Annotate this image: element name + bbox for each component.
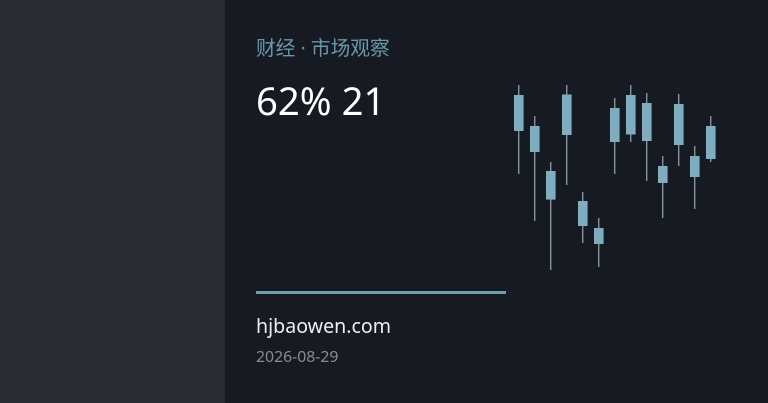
heading: category label: 财经 · 市场观察 [256, 34, 390, 61]
site name: hjbaowen.com [256, 312, 391, 339]
date: 2026-08-29 [256, 345, 338, 367]
headline figures: 62% 21 [256, 75, 385, 127]
panel: left sidebar [0, 0, 225, 403]
accent divider [256, 291, 506, 294]
